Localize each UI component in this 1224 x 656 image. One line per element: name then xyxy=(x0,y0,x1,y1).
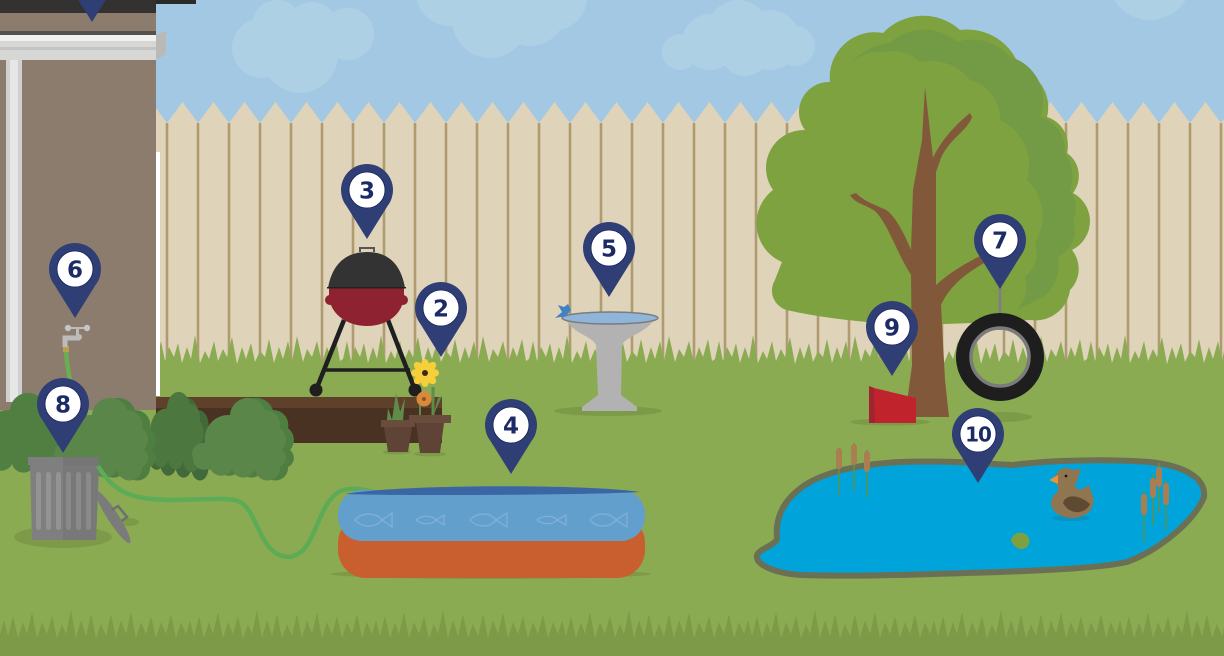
house wall xyxy=(0,0,196,410)
lily pad xyxy=(1011,533,1029,549)
pool water xyxy=(345,486,640,495)
map pin 8: 8 xyxy=(55,392,71,418)
cattails left xyxy=(836,443,870,497)
sunflower stem xyxy=(420,387,442,416)
rope xyxy=(998,285,1002,330)
map pin 6 xyxy=(49,243,101,318)
pond water xyxy=(757,460,1204,576)
bird bath xyxy=(554,304,662,416)
duck xyxy=(1049,468,1094,521)
map pin 6: 6 xyxy=(67,258,83,284)
kiddie pool xyxy=(331,486,651,579)
map pin 10: 10 xyxy=(965,422,991,446)
orange flower xyxy=(416,392,432,406)
map pin 2: 2 xyxy=(433,296,449,322)
small pot xyxy=(381,420,415,454)
map pin 3 xyxy=(341,164,393,239)
icon: bluebird xyxy=(555,304,571,318)
map pin 5 xyxy=(583,222,635,297)
shrub 1 xyxy=(0,393,66,476)
water basin xyxy=(562,312,658,324)
tree canopy front xyxy=(773,51,1043,325)
can lid xyxy=(92,488,134,546)
wooden fence xyxy=(156,102,1224,372)
map pin 10 xyxy=(952,408,1004,483)
tree canopy outer xyxy=(756,16,1090,325)
grill dome xyxy=(327,248,406,288)
map pin 1 xyxy=(66,0,118,22)
cattails right xyxy=(1141,463,1169,542)
downspout xyxy=(6,60,22,402)
trash can xyxy=(14,457,139,548)
bottom grass band xyxy=(0,608,1224,656)
map pin 9 xyxy=(866,301,918,376)
small plant xyxy=(387,393,405,420)
grill bowl xyxy=(325,288,408,326)
yellow flower xyxy=(411,359,439,387)
map pin 7: 7 xyxy=(992,228,1008,254)
map pin 3: 3 xyxy=(359,178,375,204)
large pot xyxy=(409,415,451,456)
shrub 3 xyxy=(142,392,212,481)
map pin 5: 5 xyxy=(601,236,617,262)
shrub 2 xyxy=(54,398,156,481)
pool bottom ring xyxy=(338,515,645,578)
shrubs xyxy=(0,392,294,481)
tree trunk xyxy=(850,87,986,417)
pond xyxy=(757,443,1204,576)
can body xyxy=(28,457,99,540)
map pin 9: 9 xyxy=(884,316,900,342)
grill legs xyxy=(316,320,415,390)
shrub 4 xyxy=(192,398,294,481)
clouds xyxy=(232,0,1192,93)
map pin 8 xyxy=(37,378,89,453)
roof eave xyxy=(0,0,196,13)
sky xyxy=(0,0,1224,400)
icon: faucet with hose xyxy=(63,325,90,384)
map pin 4 xyxy=(485,399,537,474)
map pin 7 xyxy=(974,214,1026,289)
back grass line xyxy=(157,333,1224,402)
tire swing xyxy=(964,285,1036,422)
red bucket xyxy=(850,386,930,426)
lawn xyxy=(0,396,1224,656)
map pin 2 xyxy=(415,282,467,357)
fish pattern xyxy=(355,513,627,527)
map pin 4: 4 xyxy=(503,414,519,440)
tree xyxy=(756,16,1090,417)
tree canopy shadow xyxy=(847,30,1076,310)
garden hose xyxy=(98,466,380,557)
bath pedestal xyxy=(566,320,654,411)
white trim xyxy=(156,152,160,396)
flower pots xyxy=(381,359,451,456)
pool top ring xyxy=(338,490,645,541)
raised garden bed xyxy=(156,397,442,443)
tire xyxy=(964,320,1036,394)
kettle grill xyxy=(310,248,422,396)
gutter xyxy=(0,31,166,60)
